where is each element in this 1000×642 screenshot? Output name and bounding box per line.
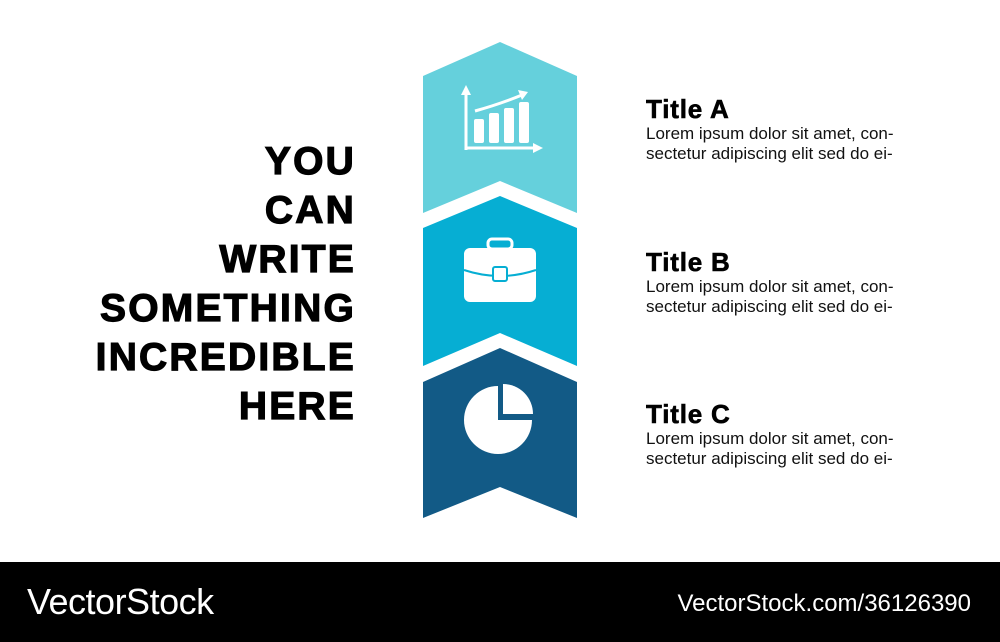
icon: briefcase — [464, 239, 536, 302]
icon: pie chart — [464, 384, 533, 454]
heading: main statement: SOMETHING — [100, 287, 356, 330]
arrow 1: light teal — [423, 42, 577, 213]
text block B — [646, 247, 894, 316]
footer bar — [0, 562, 1000, 642]
text block B: Lorem ipsum dolor sit amet, con- — [646, 277, 894, 296]
heading: main statement: CAN — [265, 189, 356, 232]
heading: main statement: YOU — [265, 140, 356, 183]
arrow 2: medium cyan — [423, 196, 577, 366]
arrow 3: dark blue — [423, 348, 577, 518]
heading: main statement: HERE — [239, 385, 356, 428]
heading: main statement — [96, 140, 356, 428]
text block A: Lorem ipsum dolor sit amet, con- — [646, 124, 894, 143]
text block C: Title C — [646, 399, 731, 429]
icon: growth chart — [461, 85, 543, 153]
text block C — [646, 399, 894, 468]
text block A: Title A — [646, 94, 730, 124]
heading: main statement: INCREDIBLE — [96, 336, 356, 379]
text block C: sectetur adipiscing elit sed do ei- — [646, 449, 893, 468]
text block B: Title B — [646, 247, 731, 277]
text block B: sectetur adipiscing elit sed do ei- — [646, 297, 893, 316]
heading: main statement: WRITE — [219, 238, 356, 281]
footer url: VectorStock.com/36126390 — [677, 590, 971, 617]
text block A — [646, 94, 894, 163]
text block A: sectetur adipiscing elit sed do ei- — [646, 144, 893, 163]
text block C: Lorem ipsum dolor sit amet, con- — [646, 429, 894, 448]
footer logo: VectorStock — [27, 581, 214, 622]
